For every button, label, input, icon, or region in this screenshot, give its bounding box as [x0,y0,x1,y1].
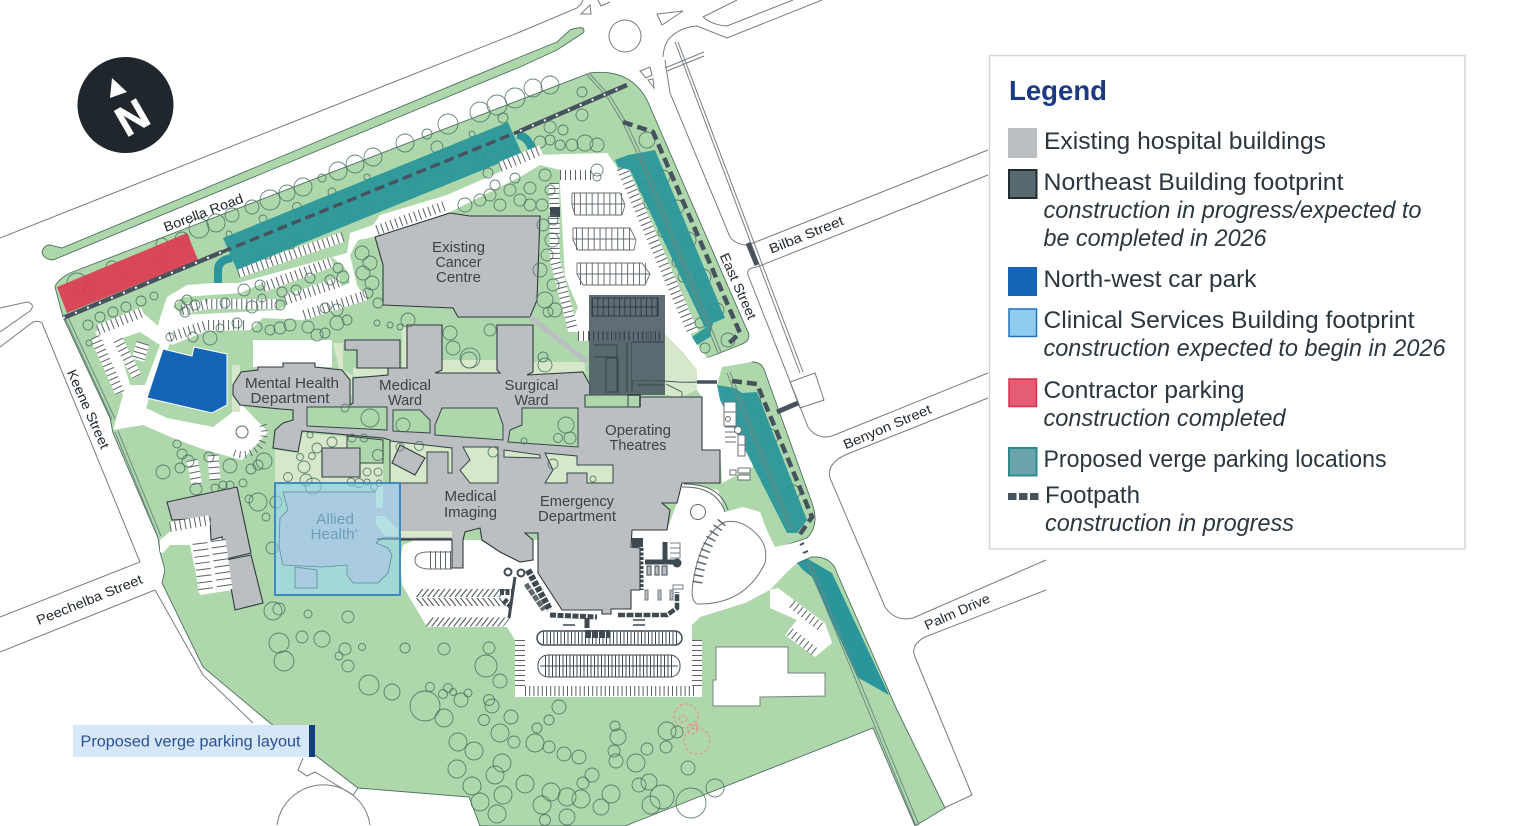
legend item: north-west car park: North-west car park [1044,266,1258,293]
label: Medical Ward: Medical [379,378,431,394]
label: Surgical Ward: Ward [514,393,548,409]
parking grids: north-east car park [572,193,650,285]
label: Medical Imaging [444,489,497,521]
drop-off arc [682,484,728,512]
slanted parking rows: south-west lot [419,593,507,622]
label: Allied Health: Allied [316,512,354,528]
label: Palm Drive: Palm Drive [922,591,992,633]
label: Keene Street: Keene Street [64,367,112,451]
panel: legend [990,56,1465,549]
legend item: northeast building [1009,169,1422,252]
road crossings [655,243,808,553]
building: main hospital [233,325,720,614]
legend item: contractor parking [1009,377,1286,432]
label: Operating Theatres [605,423,671,454]
verge parking: east street south [717,385,807,533]
north-west car park [147,347,227,413]
callout: proposed verge parking layout [73,725,315,757]
label: Borella Road: Borella Road [161,191,245,235]
label: Mental Health Department: Mental Health [245,376,339,392]
label: Operating Theatres: Operating [605,423,671,439]
median strip: Borella Road [42,28,584,260]
contractor parking [57,233,198,313]
main south car park [520,631,697,691]
parking bays [95,168,822,652]
legend item: northeast building: construction in progress/expected to [1044,197,1422,224]
landscaped islands [117,240,383,385]
verge parking: northern section [218,122,533,283]
label: Peechelba Street: Peechelba Street [34,572,145,628]
building: west block south [226,555,263,610]
street labels [34,191,992,633]
legend item: existing hospital buildings: Existing hospital buildings [1044,128,1326,155]
label: Existing Cancer Centre: Centre [436,270,481,286]
label: East Street: East Street [717,251,760,322]
white roof block near Mental Health [253,340,332,367]
verge parking: Palm Drive section [797,559,889,695]
legend item: contractor parking: construction completed [1044,405,1286,432]
roundabout [232,425,264,455]
building: west block [167,487,251,559]
label: Medical Imaging: Imaging [444,505,497,521]
drop-off loop outline [692,521,766,604]
label: Existing Cancer Centre: Cancer [436,255,482,271]
existing hospital buildings [167,213,720,614]
street network outlines [0,0,1046,825]
legend title: Legend [1009,75,1107,106]
callout: proposed verge parking layout: Proposed verge parking layout [80,734,301,750]
paths alongside verges [65,74,919,826]
legend item: contractor parking: Contractor parking [1044,377,1244,404]
roads and car park surfaces [95,153,832,697]
courtyards [307,395,628,539]
legend item: footpath [1008,482,1294,537]
label: Allied Health [310,512,358,543]
site services east of theatres [724,402,750,480]
label: Surgical Ward: Surgical [504,378,558,394]
label: Emergency Department: Emergency [540,494,615,510]
hospital site grounds [55,72,945,826]
label: Medical Imaging: Medical [444,489,496,505]
drop-off circle [690,504,706,520]
map labels [245,240,671,543]
Northeast Building footprint [589,295,682,407]
label: Medical Ward: Ward [388,393,422,409]
label: Mental Health Department: Department [250,391,330,407]
building: allied health block [279,483,400,588]
Clinical Services Building footprint [275,483,400,595]
footpath: East Street [623,122,740,345]
north arrow: N [107,89,157,145]
label: Emergency Department [538,494,616,525]
label: Allied Health: Health' [310,527,358,543]
building: small central block [322,448,360,477]
trees to be removed [674,704,710,754]
legend item: clinical services building [1009,307,1446,362]
legend item: footpath: construction in progress [1045,510,1294,537]
legend item: northeast building: be completed in 2026 [1044,225,1267,252]
label: Benyon Street: Benyon Street [841,401,934,452]
verge parking: east street north [615,150,725,345]
south-east white building [713,647,825,706]
service road to wards [530,317,587,362]
label: Mental Health Department [245,376,339,407]
legend item: northeast building: Northeast Building footprint [1044,169,1344,196]
label: Emergency Department: Department [538,509,616,525]
legend item: clinical services building: Clinical Services Building footprint [1044,307,1415,334]
row overlapping north verge [500,150,541,167]
courtyard planting: light green [232,327,697,483]
building: upper ward block [345,340,400,368]
dark landscaped edges around Emergency Department [500,538,683,634]
building: Existing Cancer Centre [375,213,540,317]
footpath: Borella Road [63,85,627,318]
legend item: clinical services building: construction expected to begin in 2026 [1044,335,1446,362]
label: Surgical Ward [504,378,558,409]
label: Medical Ward [379,378,431,409]
label: Bilba Street: Bilba Street [767,213,846,257]
north arrow [78,57,174,153]
legend item: proposed verge parking: Proposed verge parking locations [1044,446,1386,473]
label: Operating Theatres: Theatres [610,438,666,454]
label: Existing Cancer Centre [432,240,485,286]
legend item: footpath: Footpath [1045,482,1140,509]
footpath: East Street south [732,381,812,537]
trees [67,76,800,826]
label: Existing Cancer Centre: Existing [432,240,485,256]
